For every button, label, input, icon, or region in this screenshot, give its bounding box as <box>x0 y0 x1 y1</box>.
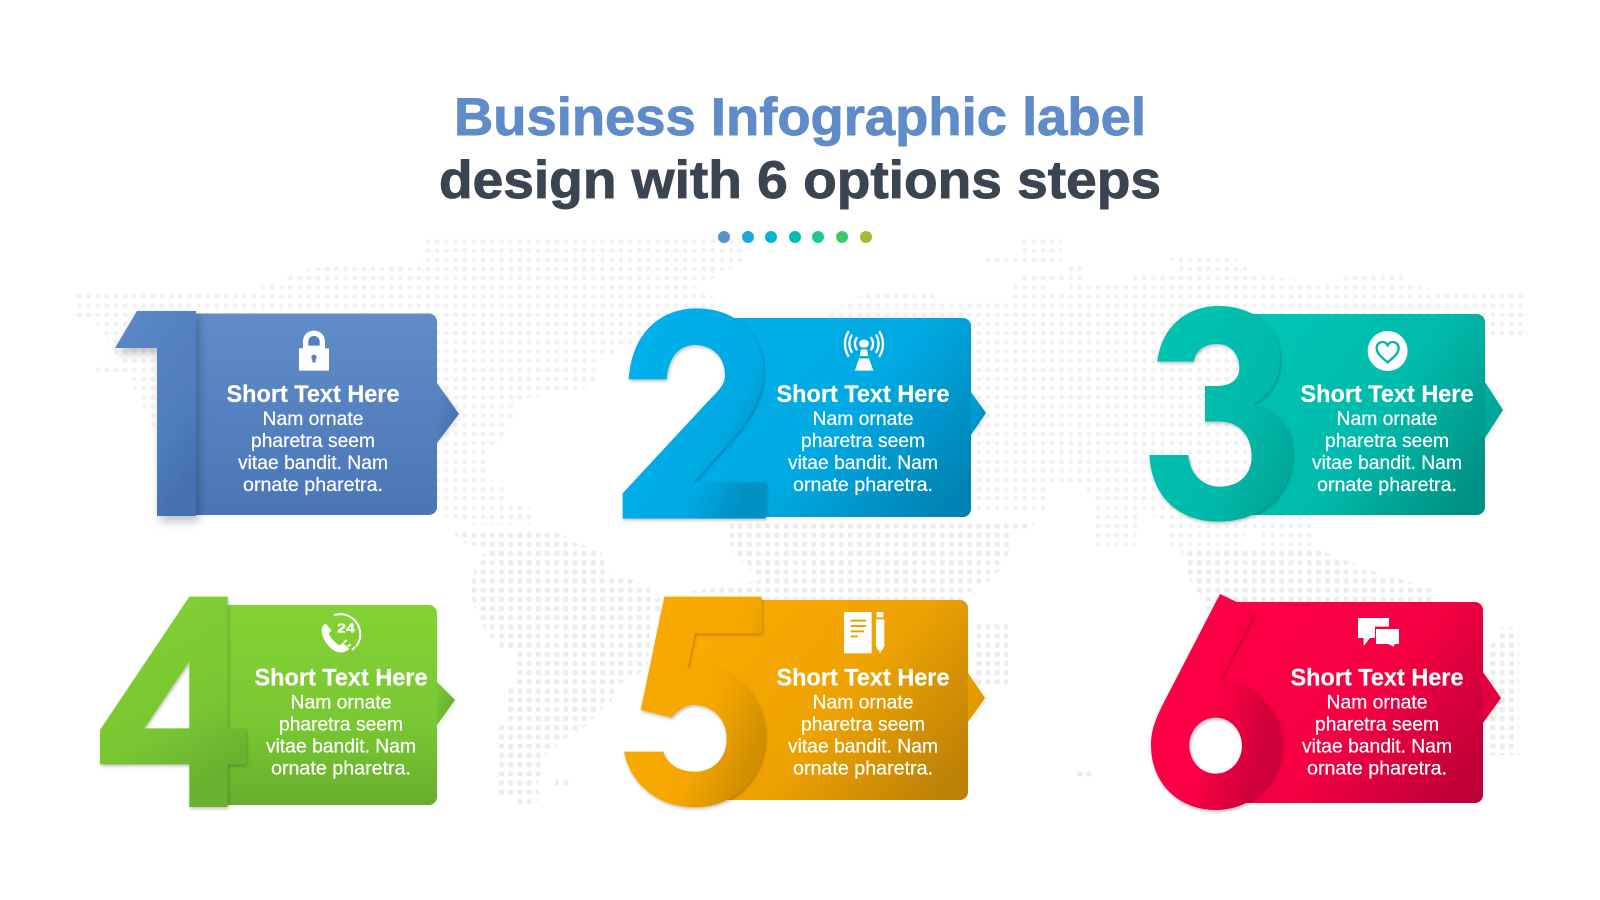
text 6 <box>1302 692 1452 780</box>
heading 5: Short Text Here <box>776 664 950 692</box>
heading 1: Short Text Here <box>226 381 400 408</box>
text 4 <box>266 692 416 780</box>
text 3: ornate pharetra. <box>1317 474 1457 496</box>
text 1 <box>238 408 388 496</box>
text 4: pharetra seem <box>279 714 403 736</box>
panel: step 3 <box>1149 306 1503 522</box>
text 2: vitae bandit. Nam <box>788 452 938 474</box>
card 1 <box>190 314 437 515</box>
panel: step 4 <box>100 597 455 807</box>
icon: 24 hour phone <box>322 614 360 653</box>
icon: 24 hour phone: 24 <box>337 621 355 635</box>
text 1: pharetra seem <box>251 430 375 452</box>
card 3 <box>1240 314 1485 515</box>
text 4: Nam ornate <box>290 692 392 714</box>
arrow 3 <box>1485 382 1503 438</box>
numeral 3 <box>1149 306 1292 522</box>
text 3: pharetra seem <box>1325 430 1449 452</box>
text 2: pharetra seem <box>801 430 925 452</box>
dot row divider <box>718 231 872 243</box>
text 5: vitae bandit. Nam <box>788 736 938 758</box>
text 2: Nam ornate <box>812 408 914 430</box>
numeral 4 <box>100 597 246 807</box>
card 5 <box>685 600 968 800</box>
card 6 <box>1210 602 1483 803</box>
arrow 1 <box>437 383 459 443</box>
text 3: Nam ornate <box>1336 408 1438 430</box>
text 2: ornate pharetra. <box>793 474 933 496</box>
arrow 5 <box>968 673 985 722</box>
text 6: pharetra seem <box>1315 714 1439 736</box>
dotted world map: southern continents <box>453 520 1519 805</box>
text 3 <box>1312 408 1462 496</box>
icon: notebook and pen <box>844 612 884 653</box>
panel: step 6 <box>1151 594 1501 810</box>
text 5: Nam ornate <box>812 692 914 714</box>
card 2 <box>680 318 971 517</box>
heading 6: Short Text Here <box>1290 664 1464 692</box>
text 6: ornate pharetra. <box>1307 758 1447 780</box>
arrow 2 <box>971 392 986 435</box>
text 6: Nam ornate <box>1326 692 1428 714</box>
numeral 2 <box>623 308 766 519</box>
card 4 <box>220 605 437 805</box>
text 3: vitae bandit. Nam <box>1312 452 1462 474</box>
title: design with 6 options steps <box>439 151 1161 210</box>
text 2 <box>788 408 938 496</box>
arrow 6 <box>1483 672 1501 723</box>
dotted world map <box>72 236 1528 560</box>
icon: padlock <box>299 331 329 371</box>
text 4: vitae bandit. Nam <box>266 736 416 758</box>
numeral 1 <box>115 311 196 516</box>
panel: step 1 <box>115 311 459 516</box>
numeral 5 <box>624 597 765 807</box>
heading 2: Short Text Here <box>776 381 950 408</box>
icon: antenna <box>845 332 883 371</box>
text 4: ornate pharetra. <box>271 758 411 780</box>
numeral 6 <box>1151 594 1282 810</box>
text 1: ornate pharetra. <box>243 474 383 496</box>
text 6: vitae bandit. Nam <box>1302 736 1452 758</box>
title <box>439 88 1161 210</box>
text 5 <box>788 692 938 780</box>
arrow 4 <box>437 682 455 725</box>
text 1: vitae bandit. Nam <box>238 452 388 474</box>
panel: step 5 <box>624 597 985 807</box>
title: Business Infographic label <box>454 88 1146 147</box>
icon: heart <box>1368 331 1408 371</box>
heading 4: Short Text Here <box>254 664 428 692</box>
text 1: Nam ornate <box>262 408 364 430</box>
icon: chat bubbles <box>1358 618 1399 647</box>
text 5: ornate pharetra. <box>793 758 933 780</box>
panel: step 2 <box>623 308 986 519</box>
heading 3: Short Text Here <box>1300 381 1474 408</box>
text 5: pharetra seem <box>801 714 925 736</box>
